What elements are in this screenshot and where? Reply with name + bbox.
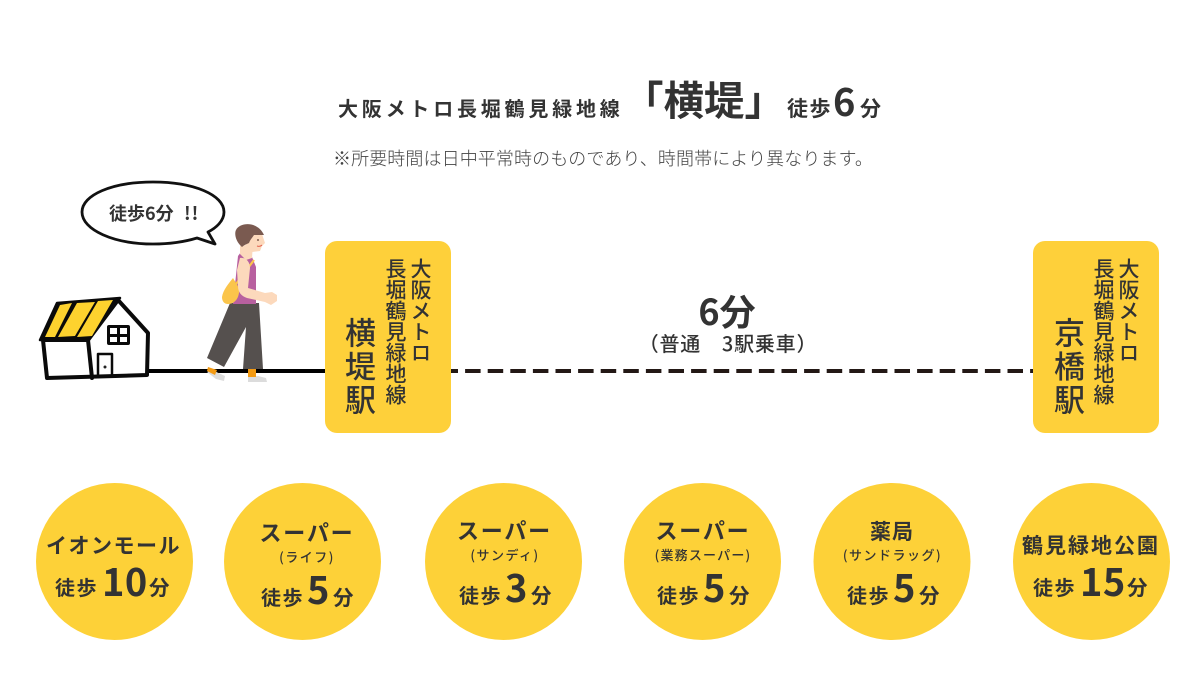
speech bubble: !! xyxy=(184,200,199,226)
circle: 薬局: 分 xyxy=(919,579,940,609)
title: 大阪メトロ長堀鶴見緑地線 xyxy=(338,93,624,122)
circle: 薬局: 徒歩 xyxy=(847,580,890,609)
travel time xyxy=(639,284,817,357)
circle: スーパー(サンディ) xyxy=(425,483,582,640)
circle: スーパー(業務スーパー) xyxy=(624,483,781,640)
circle: スーパー(業務スーパー): (業務スーパー) xyxy=(655,545,751,564)
circle: スーパー(ライフ): 徒歩 xyxy=(261,582,304,611)
title xyxy=(338,68,881,127)
icon: house xyxy=(40,298,148,378)
note text: ※所要時間は日中平常時のものであり、時間帯により異なります。 xyxy=(333,145,873,171)
circle: スーパー(業務スーパー): スーパー xyxy=(656,514,750,546)
circle: スーパー(ライフ): 分 xyxy=(333,581,354,611)
line name: 大阪メトロ xyxy=(1114,258,1144,363)
line name xyxy=(1089,258,1144,405)
speech bubble xyxy=(82,182,224,244)
title: 6 xyxy=(833,72,855,127)
circle: 鶴見緑地公園: 分 xyxy=(1127,571,1148,601)
title: 分 xyxy=(860,93,881,123)
title: 徒歩 xyxy=(787,93,832,123)
circle: 鶴見緑地公園: 15 xyxy=(1080,552,1126,607)
circle: 鶴見緑地公園: 鶴見緑地公園 xyxy=(1022,530,1160,560)
circle: スーパー(サンディ): 3 xyxy=(505,558,527,613)
line name: 大阪メトロ xyxy=(406,258,436,363)
circle: イオンモール: 分 xyxy=(149,571,170,601)
circle: スーパー(ライフ): (ライフ) xyxy=(279,547,335,566)
circle: イオンモール: 徒歩 xyxy=(55,572,98,601)
title: 「横堤」 xyxy=(623,68,785,127)
circle: 薬局: 5 xyxy=(893,558,915,613)
circle: スーパー(サンディ): スーパー xyxy=(457,514,552,546)
circle: スーパー(サンディ): 徒歩 xyxy=(459,580,502,609)
line name: 長堀鶴見緑地線 xyxy=(381,258,411,405)
station name: 横堤駅 xyxy=(338,317,383,418)
circle: 薬局: 薬局 xyxy=(870,516,914,546)
circle: スーパー(業務スーパー): 5 xyxy=(703,558,725,613)
circle: イオンモール: イオンモール xyxy=(46,530,181,560)
circle: スーパー(ライフ): 5 xyxy=(307,560,329,615)
speech bubble: 徒歩6分 xyxy=(109,200,174,226)
station name: 京橋駅 xyxy=(1047,317,1092,418)
circle: スーパー(ライフ): スーパー xyxy=(260,516,354,548)
circle: イオンモール: 10 xyxy=(102,552,148,607)
illustration: walking person xyxy=(207,224,277,382)
circle: スーパー(サンディ): (サンディ) xyxy=(470,545,540,564)
station box: 京橋駅 xyxy=(1033,241,1159,433)
line name: 長堀鶴見緑地線 xyxy=(1089,258,1119,405)
circle: スーパー(業務スーパー): 徒歩 xyxy=(657,580,700,609)
line name xyxy=(381,258,436,405)
circle: スーパー(ライフ) xyxy=(224,483,381,640)
circle: スーパー(業務スーパー): 分 xyxy=(729,579,750,609)
circle: 鶴見緑地公園 xyxy=(1013,483,1170,640)
circle: 薬局 xyxy=(814,483,970,640)
circle: 薬局: (サンドラッグ) xyxy=(843,545,942,564)
circle: イオンモール xyxy=(36,483,193,640)
travel time: 6分 xyxy=(698,284,756,336)
travel time: （普通 3駅乗車） xyxy=(639,328,817,357)
dashed route line xyxy=(451,369,1033,373)
circle: スーパー(サンディ): 分 xyxy=(531,579,552,609)
solid route line xyxy=(148,369,326,373)
station box: 横堤駅 xyxy=(325,241,451,433)
circle: 鶴見緑地公園: 徒歩 xyxy=(1033,572,1076,601)
